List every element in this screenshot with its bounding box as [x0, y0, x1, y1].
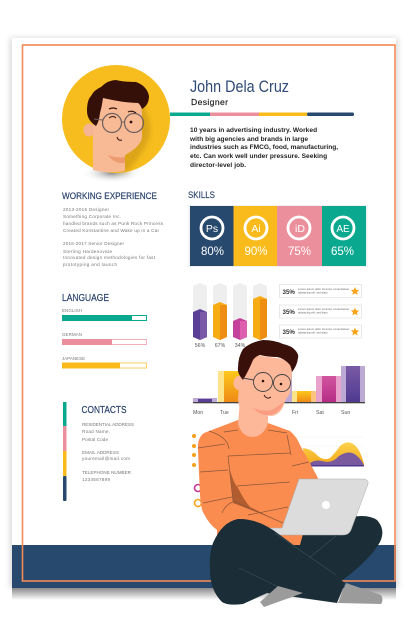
- working experience text: 2013-2015 Designer: [63, 207, 109, 212]
- portrait: John Dela Cruz avatar: [62, 65, 170, 183]
- hair: [238, 340, 298, 380]
- working experience text: handled brands such as Punk Rock Princess: [63, 221, 164, 226]
- callout cards: adipiscing elit, sed diam: [298, 330, 328, 334]
- shoes: [260, 586, 303, 607]
- language bars: [62, 308, 146, 368]
- glasses: [243, 372, 290, 392]
- callout cards: adipiscing elit, sed diam: [298, 310, 328, 314]
- chart: 3D column gauges: [193, 283, 267, 349]
- chart: weekly bars: Sat: [316, 410, 324, 416]
- contact details: EMAIL ADDRESS: [82, 450, 119, 455]
- callout cards: Lorem ipsum dolor sit amet, consectetuer: [298, 327, 349, 331]
- contact details: Postal Code: [82, 437, 108, 442]
- chart: weekly bars: Tue: [220, 410, 229, 416]
- skills panel: 80%: [201, 246, 224, 258]
- language bars: JAPANESE: [62, 356, 85, 361]
- working experience text: Created Konstantine and Wake up in a Car: [63, 228, 159, 233]
- contact details: TELEPHONE NUMBER: [82, 470, 132, 475]
- skills panel: 75%: [288, 246, 311, 258]
- language bars: ENGLISH: [62, 308, 82, 313]
- contact details: RESIDENTIAL ADDRESS: [82, 422, 134, 427]
- working experience text: [63, 207, 164, 267]
- language bars: GERMAN: [62, 332, 82, 337]
- hair: [87, 80, 149, 126]
- heading: skills: SKILLS: [188, 190, 215, 201]
- profile summary: industries such as FMCG, food, manufacturing,: [190, 144, 338, 151]
- chart: 3D column gauges: 34%: [235, 343, 246, 349]
- head: [238, 355, 292, 416]
- name heading: John Dela Cruz: [190, 78, 289, 96]
- skills panel: 90%: [244, 246, 268, 258]
- working experience text: 2016-2017 Senior Designer: [63, 241, 124, 246]
- profile summary: [189, 127, 338, 169]
- contact details: youremail@mail.com: [82, 456, 130, 461]
- laptop: [260, 479, 368, 535]
- skills panel: AE: [336, 224, 350, 235]
- skills panel: [188, 205, 368, 267]
- skills panel: Ps: [206, 223, 218, 235]
- callout cards: 35%: [282, 289, 295, 296]
- ear: [84, 124, 94, 136]
- heading: language: LANGUAGE: [62, 293, 109, 304]
- neck: [238, 400, 268, 437]
- sweater stripes: [198, 430, 309, 523]
- contacts colour stripe: [63, 402, 66, 501]
- chart: weekly bars: [193, 366, 365, 416]
- chart: 3D column gauges: 67%: [215, 343, 226, 349]
- profile summary: director-level job.: [190, 162, 246, 169]
- skills panel: Ai: [251, 223, 261, 235]
- working experience text: Sterling Hardenovate: [63, 249, 112, 254]
- profile summary: etc. Can work well under pressure. Seeking: [190, 153, 327, 160]
- eyebrows and eyes: [109, 108, 136, 113]
- profile summary: 10 years in advertising industry. Worked: [190, 127, 317, 134]
- sleeve shadow: [230, 470, 272, 518]
- contact details: [82, 422, 134, 482]
- glasses: [102, 114, 122, 132]
- callout cards: 35%: [282, 329, 295, 336]
- callout cards: 35%: [282, 309, 295, 316]
- sweater: [198, 420, 318, 545]
- working experience text: prototyping and launch: [63, 262, 117, 267]
- callout cards: adipiscing elit, sed diam: [298, 290, 328, 294]
- skills panel: iD: [295, 223, 305, 235]
- contact details: Road Name,: [82, 429, 110, 434]
- callout cards: Lorem ipsum dolor sit amet, consectetuer: [298, 287, 349, 291]
- front crossed leg: [210, 519, 345, 605]
- back leg and right knee: [290, 516, 382, 590]
- working experience text: Innovated design methodologies for fast: [63, 255, 156, 260]
- profile summary: with big agencies and brands in large: [189, 136, 308, 143]
- skills panel: 65%: [331, 246, 354, 258]
- chart: area curves: [280, 437, 364, 466]
- illustration: man with laptop: [198, 340, 382, 607]
- color bar: [170, 112, 354, 116]
- chart: weekly bars: Fri: [292, 410, 298, 416]
- chart: weekly bars: Sun: [341, 410, 350, 416]
- chart: weekly bars: Mon: [193, 410, 203, 416]
- heading: contacts: CONTACTS: [82, 405, 127, 416]
- heading: working experience: WORKING EXPERIENCE: [62, 191, 157, 202]
- callout cards: [280, 284, 362, 338]
- chart: bullets and rings: [192, 434, 202, 506]
- face: [93, 96, 142, 172]
- callout cards: Lorem ipsum dolor sit amet, consectetuer: [298, 307, 349, 311]
- working experience text: Something Corporate Inc.: [63, 214, 121, 219]
- chart: 3D column gauges: 56%: [195, 343, 206, 349]
- job title: Designer: [191, 97, 228, 107]
- contact details: 1234567899: [82, 477, 110, 482]
